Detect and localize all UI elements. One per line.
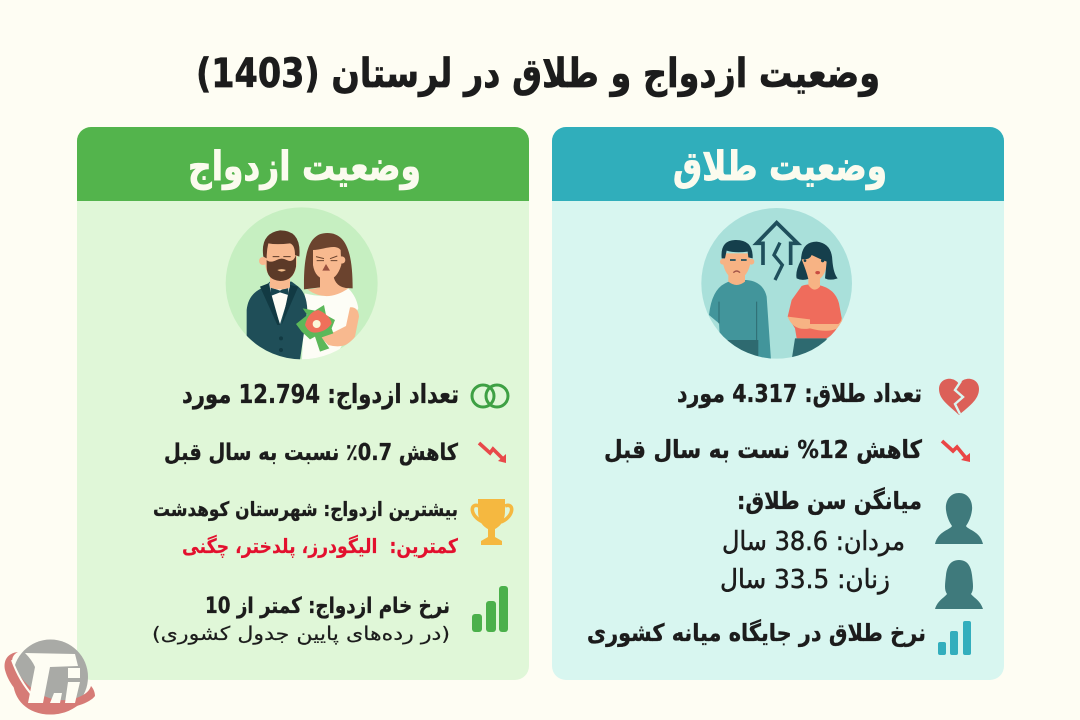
stat row: most and least marriages: کمترین: الیگودرز، پلدختر، چگنی [182, 534, 458, 559]
icon: wedding rings [472, 385, 508, 407]
illustration: bride and groom [226, 207, 378, 367]
panel: marriage [77, 127, 529, 680]
panel: divorce [552, 127, 1004, 680]
stat block: average divorce age [720, 487, 983, 609]
stat row: marriages change: کاهش 0.7٪ نسبت به سال قبل [164, 440, 459, 466]
stat row: divorces count: تعداد طلاق: 4.317 مورد [677, 379, 922, 409]
stat row: marriages count: تعداد ازدواج: 12.794 مورد [182, 380, 459, 410]
panel header: marriage [77, 127, 529, 201]
icon: down arrow [479, 443, 506, 463]
illustration: separated couple [701, 208, 852, 360]
stat row: crude marriage rate: نرخ خام ازدواج: کمتر از 10 [205, 594, 450, 619]
logo [5, 640, 95, 714]
panel header: divorce [552, 127, 1004, 201]
heading: divorce status: وضعیت طلاق [673, 144, 887, 190]
stat row: divorce rate: نرخ طلاق در جایگاه میانه کشوری [587, 619, 926, 647]
title: وضعیت ازدواج و طلاق در لرستان (1403) [196, 51, 880, 97]
stat row: most and least marriages: بیشترین ازدواج: شهرستان کوهدشت [153, 497, 458, 521]
icon: bar chart [472, 586, 508, 632]
stat row: most and least marriages [153, 497, 512, 559]
icon: bar chart [938, 621, 971, 655]
icon: woman [935, 560, 983, 609]
icon: man [935, 493, 983, 544]
icon: broken heart [939, 379, 979, 415]
stat block: average divorce age: مردان: 38.6 سال [722, 527, 905, 557]
stat row: divorces change: کاهش 12% نست به سال قبل [604, 435, 922, 464]
stat block: average divorce age: زنان: 33.5 سال [720, 565, 890, 595]
icon: down arrow [942, 441, 970, 462]
stat row: crude marriage rate: (در رده‌های پایین جدول کشوری) [152, 623, 450, 645]
icon: trophy [472, 499, 512, 545]
stat row: crude marriage rate [152, 586, 508, 645]
stat block: average divorce age: میانگن سن طلاق: [737, 487, 922, 515]
heading: marriage status: وضعیت ازدواج [188, 144, 421, 190]
